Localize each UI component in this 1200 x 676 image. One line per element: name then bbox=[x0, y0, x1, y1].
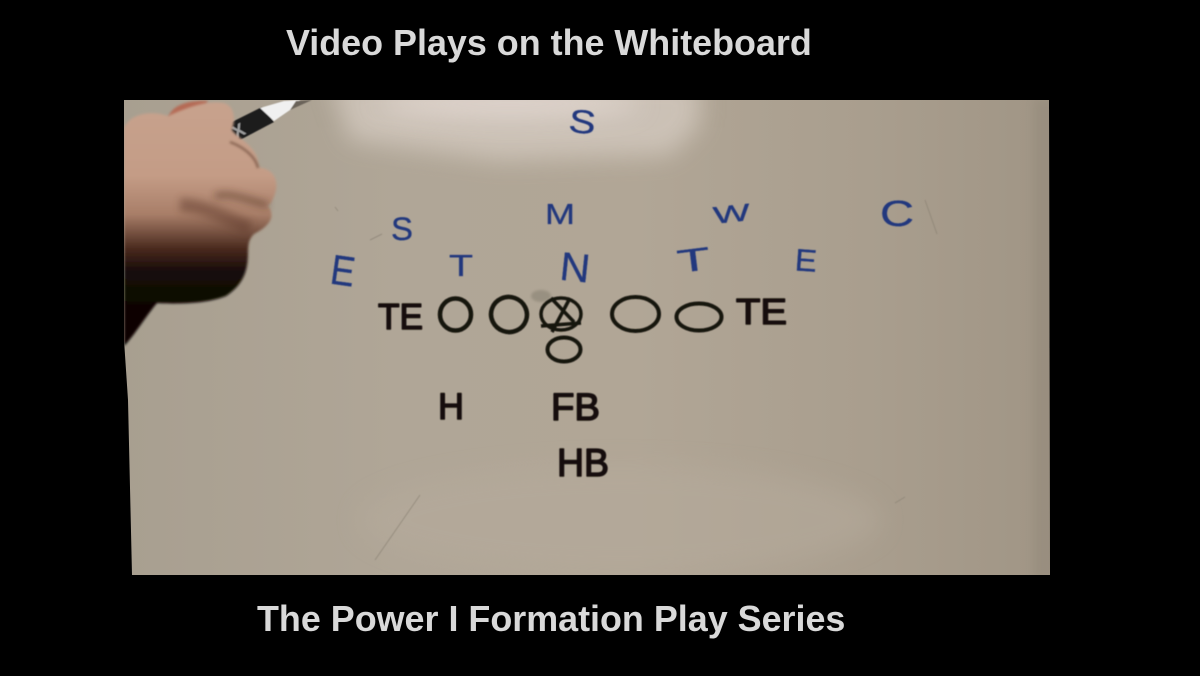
defense letters (blue): E bbox=[794, 242, 818, 279]
icon: hand holding marker bbox=[124, 100, 312, 346]
offense letters (black): H bbox=[438, 386, 464, 427]
defense letters (blue): T bbox=[449, 248, 473, 283]
defense letters (blue): C bbox=[880, 193, 914, 234]
icon: marker: X bbox=[228, 119, 248, 143]
icon: hand bbox=[124, 101, 276, 346]
defense letters (blue): W bbox=[712, 199, 752, 230]
icon: marker bbox=[230, 100, 312, 140]
defense letters (blue): E bbox=[328, 246, 358, 296]
defense letters (blue): T bbox=[675, 240, 712, 280]
defense letters (blue): N bbox=[558, 245, 592, 292]
offense letters (black): TE bbox=[378, 296, 423, 337]
subtitle: The Power I Formation Play Series bbox=[257, 599, 845, 639]
whiteboard video frame bbox=[124, 100, 1050, 575]
whiteboard surface bbox=[120, 80, 1056, 580]
offensive line circles bbox=[440, 292, 722, 362]
knuckle shading bbox=[230, 142, 258, 168]
defense letters (blue) bbox=[328, 102, 914, 296]
offense letters (black): FB bbox=[551, 387, 600, 429]
defense letters (blue): S bbox=[567, 102, 598, 141]
title: Video Plays on the Whiteboard bbox=[286, 23, 812, 63]
defense letters (blue): S bbox=[391, 211, 413, 247]
offense letters (black): HB bbox=[557, 442, 609, 485]
defense letters (blue): M bbox=[545, 199, 575, 231]
offense letters (black) bbox=[378, 291, 787, 485]
offense letters (black): TE bbox=[736, 291, 787, 332]
